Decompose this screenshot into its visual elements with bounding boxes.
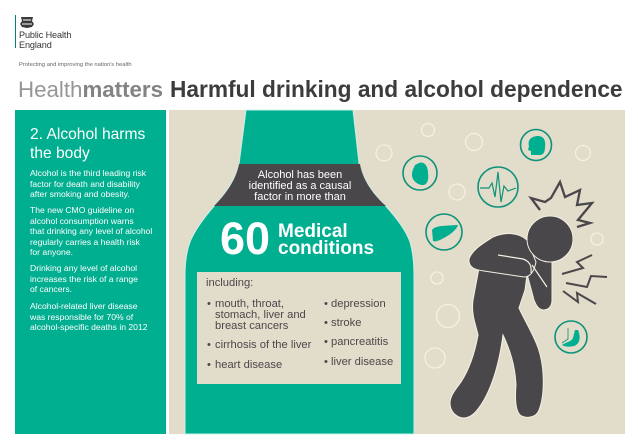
list: right column: pancreatitis — [331, 336, 388, 348]
panel heading: the body — [30, 144, 90, 162]
paragraph: range of cancers — [30, 263, 138, 294]
paragraph: CMO guideline: The new CMO guideline on — [30, 205, 134, 215]
tagline: Protecting and improving the nation's health — [19, 62, 132, 68]
label: medical conditions: Medical — [278, 221, 348, 242]
icon: stomach — [555, 321, 587, 353]
list: left column: heart disease — [215, 359, 282, 371]
figure arm to neck — [527, 240, 552, 310]
icon: liver — [426, 214, 462, 250]
bottle text: causal factor: Alcohol has been — [258, 168, 342, 180]
paragraph: CMO guideline — [30, 205, 152, 257]
number 60: 60 — [220, 213, 270, 264]
list: left column: mouth, throat, — [215, 298, 284, 310]
list: right column: stroke — [331, 317, 361, 329]
list: left column: stomach, liver and — [215, 309, 306, 321]
list: right column — [324, 298, 393, 368]
paragraph: liver disease — [30, 301, 148, 332]
list: left column: breast cancers — [215, 320, 288, 332]
paragraph: third leading risk factor: Alcohol is the third leading risk — [30, 168, 146, 178]
panel heading — [30, 126, 145, 162]
logo: Public Health England: England — [19, 40, 52, 50]
bottle text: causal factor: identified as a causal — [249, 180, 351, 192]
paragraph: liver disease: alcohol-specific deaths in 2012 — [30, 322, 148, 332]
paragraph: range of cancers: increases the risk of a range — [30, 274, 138, 284]
paragraph: CMO guideline: that drinking any level of alcohol — [30, 226, 152, 236]
paragraph: third leading risk factor — [30, 168, 146, 199]
bottle text: causal factor — [249, 168, 351, 203]
paragraph: third leading risk factor: factor for death and disability — [30, 179, 140, 189]
lightning bolts — [562, 255, 607, 304]
paragraph: CMO guideline: alcohol consumption warns — [30, 216, 134, 226]
list: right column: • — [324, 336, 328, 348]
list: right column: • — [324, 298, 328, 310]
panel: alcohol harms the body — [15, 110, 166, 434]
list: left column: • — [207, 298, 211, 310]
list: right column: liver disease — [331, 356, 393, 368]
paragraph: liver disease: was responsible for 70% of — [30, 312, 133, 322]
paragraph: range of cancers: of cancers. — [30, 284, 72, 294]
logo: Public Health England — [15, 15, 71, 50]
list: left column: cirrhosis of the liver — [215, 339, 311, 351]
paragraph: CMO guideline: regularly carries a health risk — [30, 236, 140, 246]
figure legs and torso — [450, 268, 543, 418]
list: left column: • — [207, 359, 211, 371]
paragraph: liver disease: Alcohol-related liver disease — [30, 301, 137, 311]
list heading: including: — [206, 277, 253, 289]
bottle text: causal factor: factor in more than — [254, 191, 346, 203]
paragraph: range of cancers: Drinking any level of alcohol — [30, 263, 137, 273]
list: right column: • — [324, 317, 328, 329]
icon: heartbeat — [478, 167, 518, 207]
panel: including list — [197, 272, 401, 384]
list: right column: • — [324, 356, 328, 368]
figure arm and shoulder — [469, 234, 536, 277]
paragraph: CMO guideline: for anyone. — [30, 247, 73, 257]
label: medical conditions: conditions — [278, 238, 374, 259]
logo: Public Health England: Public Health — [19, 30, 71, 40]
list: left column: • — [207, 339, 211, 351]
paragraph: third leading risk factor: after smoking and obesity. — [30, 189, 130, 199]
panel: beige background — [169, 110, 625, 434]
pain burst lines — [531, 182, 592, 227]
panel heading: 2. Alcohol harms — [30, 126, 145, 143]
icon: head — [520, 130, 552, 160]
figure head — [527, 216, 573, 262]
title: harmful drinking: Harmful drinking and alcohol dependence — [170, 76, 623, 102]
list: left column — [207, 298, 312, 371]
label: medical conditions — [278, 221, 374, 259]
title: healthmatters: Healthmatters — [18, 76, 163, 102]
icon: heart — [403, 156, 437, 190]
list: right column: depression — [331, 298, 386, 310]
